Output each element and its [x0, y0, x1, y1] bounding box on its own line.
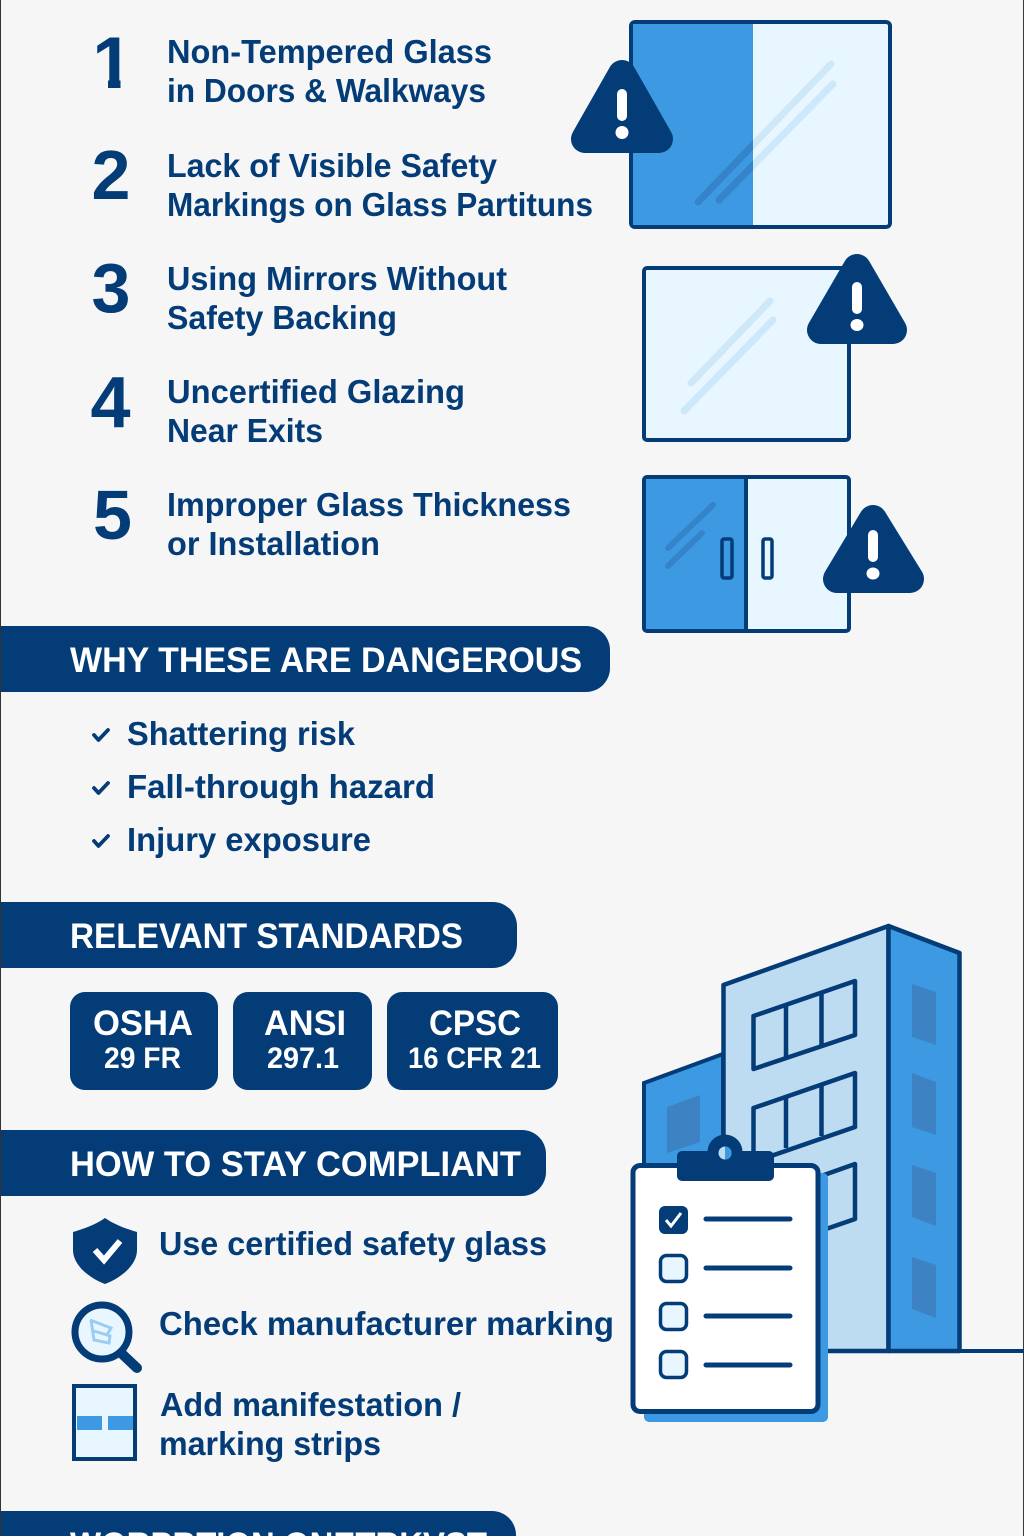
hazard 3: Using Mirrors Without	[167, 260, 507, 297]
hazard 4: 4	[90, 363, 131, 443]
icon: warning triangle	[585, 74, 659, 139]
hazard 2: Lack of Visible Safety	[167, 147, 498, 184]
hazard 3: 3	[92, 249, 130, 327]
checklist: dangers	[94, 715, 435, 858]
action: manufacturer marking	[75, 1305, 614, 1368]
icon: magnifier	[75, 1305, 137, 1368]
hazard 1: 1	[92, 23, 133, 104]
badges: standards	[70, 992, 558, 1090]
clip	[677, 1134, 774, 1181]
hazard 2: Markings on Glass Partituns	[167, 186, 593, 223]
heading: relevant standards: RELEVANT STANDARDS	[70, 917, 463, 956]
badge: OSHA: OSHA	[93, 1004, 193, 1043]
badge: OSHA	[70, 992, 218, 1090]
ground line	[820, 1349, 1024, 1353]
danger: fall-through: Fall-through hazard	[127, 768, 435, 805]
list: five glazing hazards	[90, 23, 593, 562]
heading: cropped bottom section	[1, 1511, 516, 1536]
danger: injury: Injury exposure	[127, 821, 371, 858]
illustration: mirror panel with warning	[644, 268, 893, 440]
danger: shattering: Shattering risk	[127, 715, 356, 752]
hazard 2: 2	[92, 136, 130, 214]
heading: relevant standards	[1, 902, 517, 968]
unchecked item	[660, 1256, 790, 1282]
badge: CPSC: CPSC	[429, 1004, 521, 1043]
action: manifestation strips: marking strips	[159, 1425, 381, 1462]
illustration: double glass door with warning	[644, 477, 910, 631]
checked item	[659, 1206, 790, 1234]
unchecked item	[660, 1352, 790, 1378]
illustration: half-tinted glass panel with warning	[585, 22, 890, 227]
action: certified glass: Use certified safety glass	[159, 1225, 547, 1262]
hazard 5: or Installation	[167, 525, 380, 562]
hazard 3	[92, 249, 507, 336]
hazard 5: 5	[93, 476, 132, 554]
badge: ANSI: 297.1	[267, 1042, 339, 1075]
illustration: clipboard checklist	[633, 1134, 828, 1422]
action: manifestation strips: Add manifestation /	[160, 1386, 461, 1423]
list: compliance actions	[73, 1218, 614, 1462]
hazard 1: in Doors & Walkways	[167, 72, 486, 109]
badge: ANSI	[233, 992, 372, 1090]
icon: warning triangle	[821, 268, 893, 331]
hazard 1	[97, 38, 491, 109]
badge: CPSC: 16 CFR 21	[408, 1042, 541, 1075]
hazard 4: Near Exits	[167, 412, 323, 449]
hazard 3: Safety Backing	[167, 299, 397, 336]
main building	[724, 926, 960, 1351]
heading: how to stay compliant	[1, 1130, 546, 1196]
back building	[644, 1054, 723, 1175]
hazard 4	[90, 363, 465, 449]
hazard 2	[92, 136, 593, 223]
badge: OSHA: 29 FR	[104, 1042, 181, 1075]
icon: shield	[73, 1218, 137, 1284]
hazard 1: Non-Tempered Glass	[167, 33, 492, 70]
icon: window with strips	[74, 1386, 135, 1459]
unchecked item	[660, 1304, 790, 1330]
action: manifestation strips	[74, 1386, 461, 1462]
hazard 4: Uncertified Glazing	[167, 373, 465, 410]
icon: warning triangle	[837, 519, 910, 580]
heading: how to stay compliant: HOW TO STAY COMPLIANT	[70, 1145, 521, 1184]
action: certified glass	[73, 1218, 547, 1284]
illustration: building	[644, 926, 1024, 1353]
heading: why these are dangerous	[1, 626, 610, 692]
heading: why these are dangerous: WHY THESE ARE DANGEROUS	[70, 641, 582, 680]
action: manufacturer marking: Check manufacturer marking	[159, 1305, 614, 1342]
badge: CPSC	[387, 992, 558, 1090]
badge: ANSI: ANSI	[264, 1004, 346, 1043]
hazard 5: Improper Glass Thickness	[167, 486, 571, 523]
hazard 5	[93, 476, 571, 562]
